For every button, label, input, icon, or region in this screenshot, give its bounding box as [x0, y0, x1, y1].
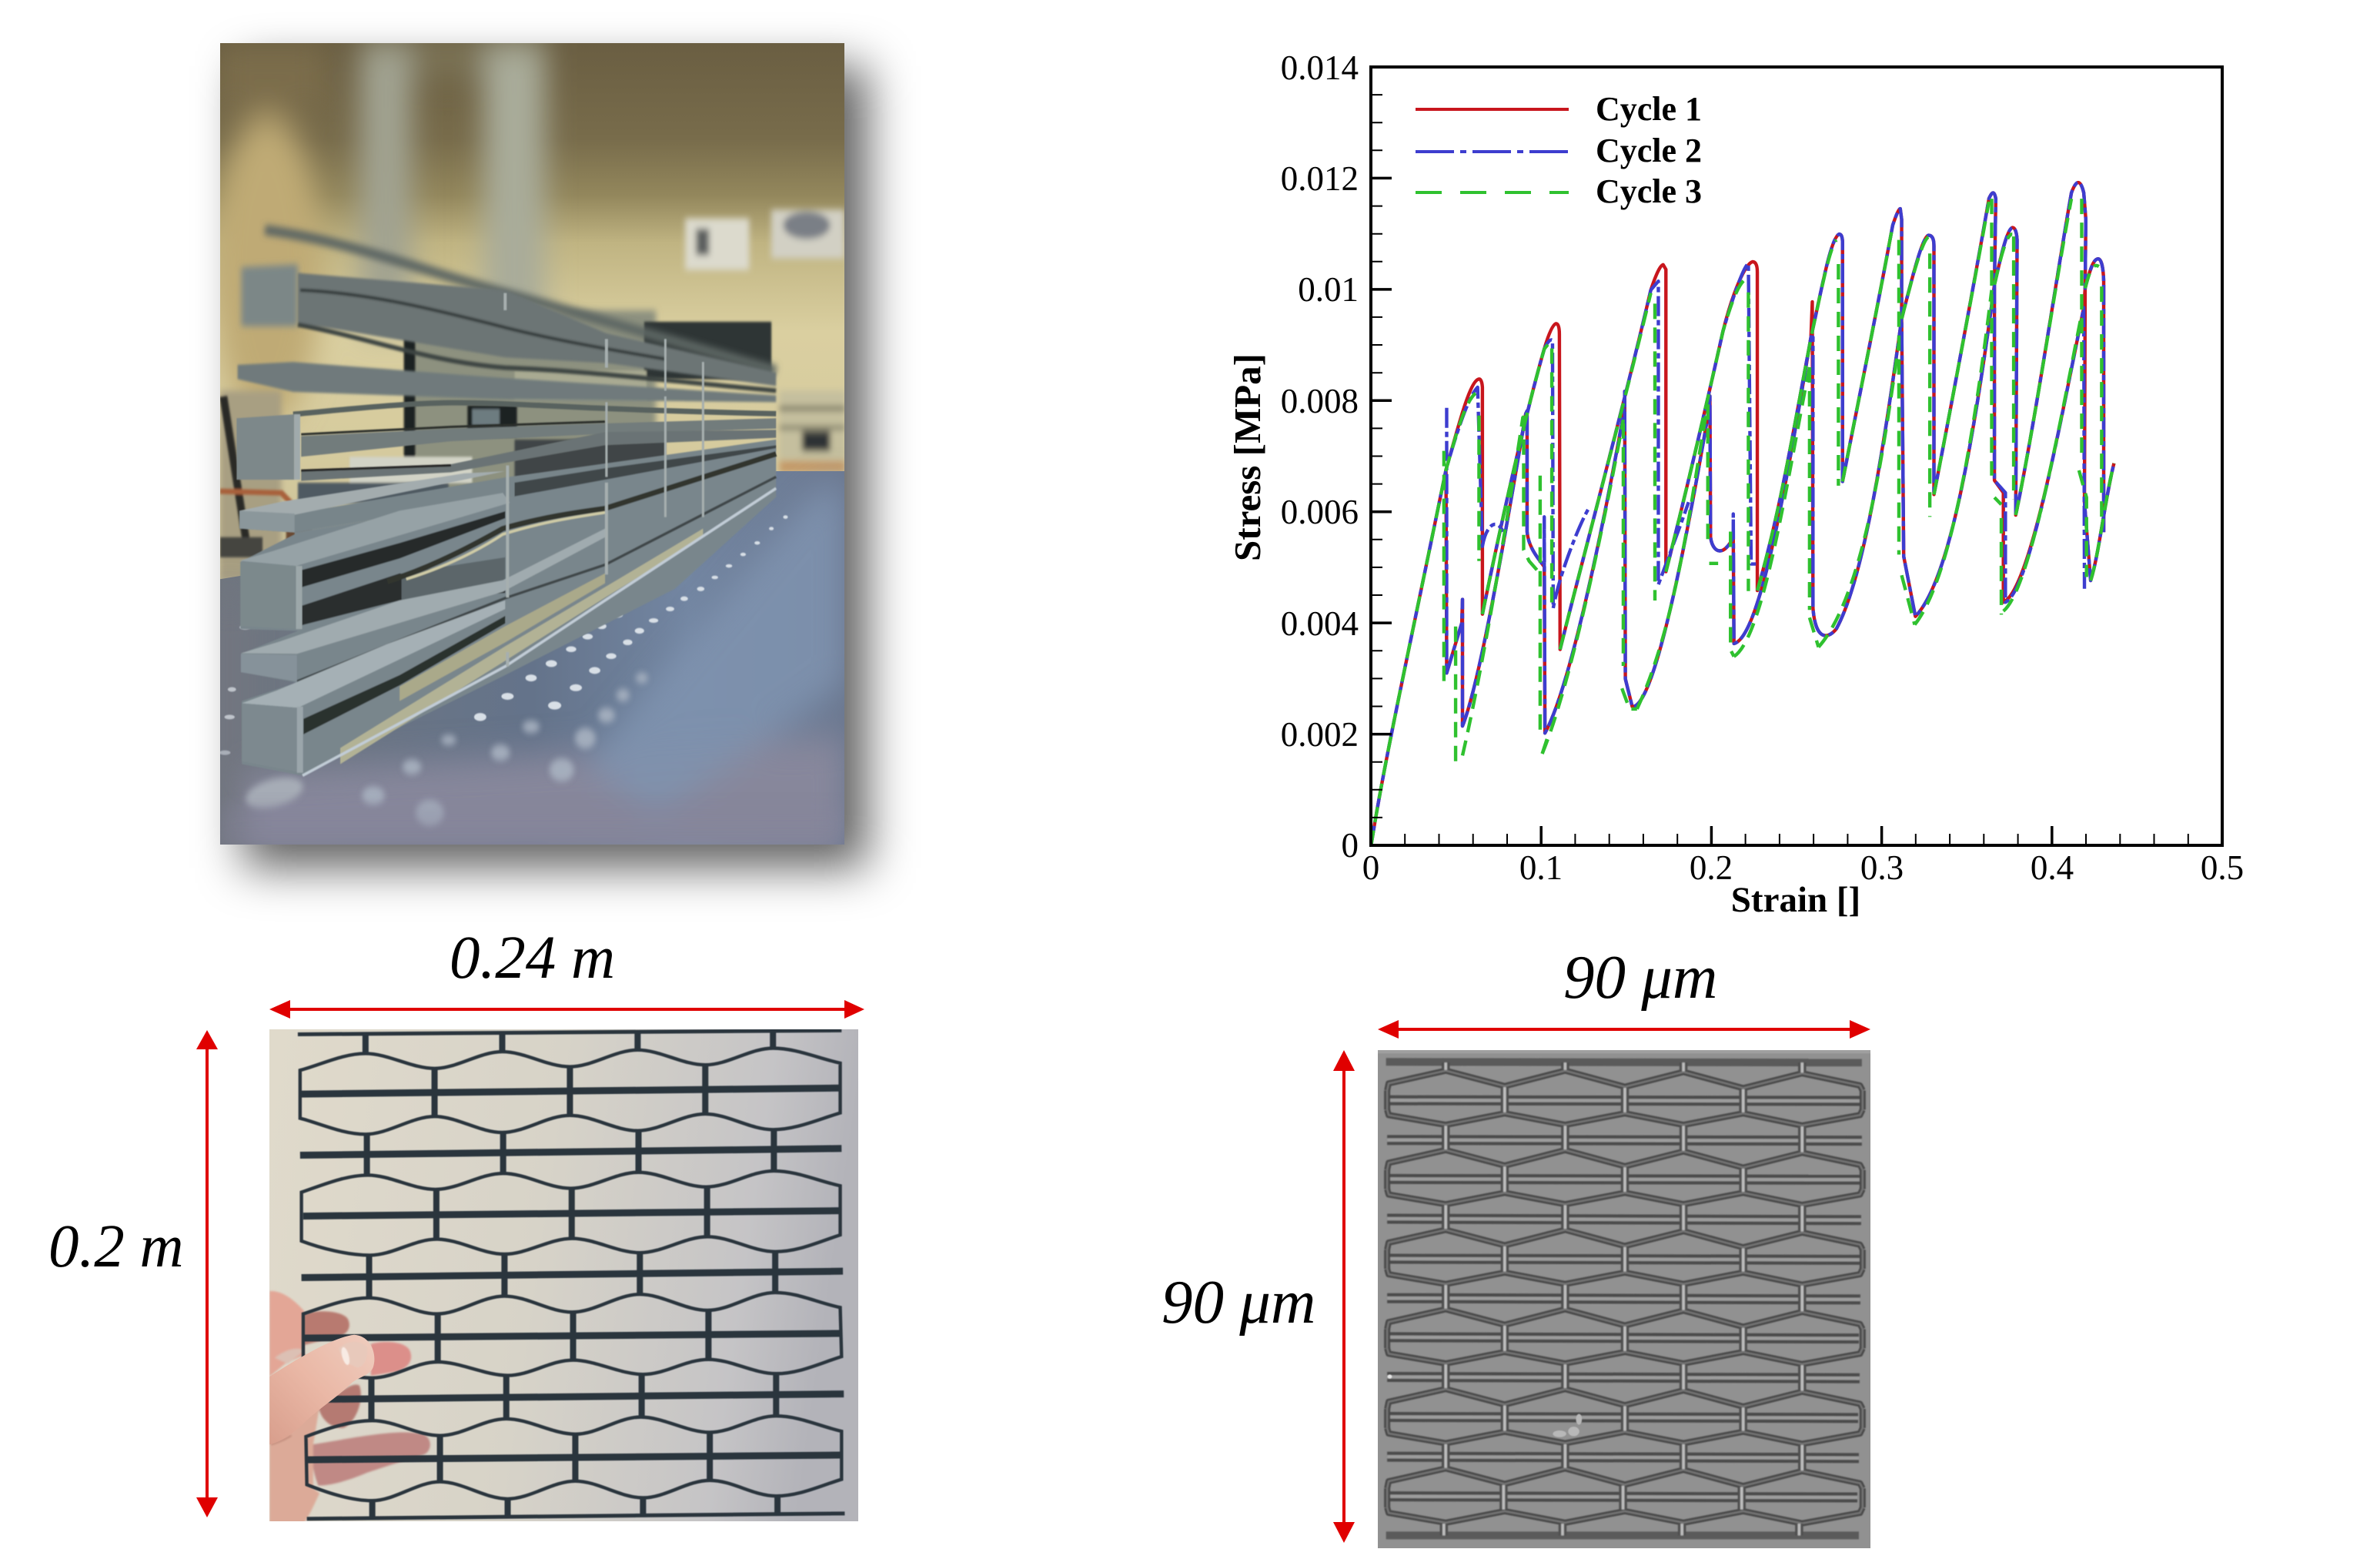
Cycle 3 curve (green dashed) [1371, 199, 2114, 845]
y-axis tick labels: 0.004 [1281, 604, 1359, 643]
lower beam block [240, 448, 776, 775]
lattice horizontal bars [298, 1030, 844, 1519]
arrow: horizontal 90 μm span [1378, 1020, 1870, 1039]
arrow: vertical 90 μm span [1333, 1050, 1355, 1543]
y-axis title: Stress [MPa] [1226, 353, 1269, 561]
legend: Cycle 1 [1596, 90, 1702, 128]
y-axis tick labels [1281, 49, 1359, 865]
dimension label: 90 μm horizontal: 90 μm [1563, 942, 1717, 1012]
Cycle 1 curve (red solid) [1371, 182, 2114, 845]
y-axis tick labels: 0.006 [1281, 493, 1359, 531]
dimension label: 0.24 m: 0.24 m [450, 925, 615, 992]
x-axis title: Strain [] [1731, 880, 1860, 920]
arrow: horizontal 0.24 m span [269, 1000, 864, 1019]
dimension label: 0.2 m: 0.2 m [48, 1213, 184, 1280]
panel: photo of the metre-scale aluminium structure [213, 40, 867, 868]
dimension label: 90 μm vertical: 90 μm [1162, 1267, 1315, 1337]
x-axis tick labels: 0.5 [2201, 848, 2244, 887]
panel: micrograph of micro-scale lattice [1378, 1050, 1870, 1548]
chart: stress vs strain for three cycles [1226, 49, 2244, 920]
photo drop shadow [243, 66, 867, 868]
y-axis tick labels: 0.014 [1281, 49, 1359, 87]
x-axis tick labels: 0.1 [1519, 848, 1563, 887]
photograph of beams on optical table [220, 43, 844, 845]
y-axis tick labels: 0 [1341, 826, 1359, 865]
table surface with mounting holes [213, 471, 844, 856]
lattice hexagon wave lines [300, 1048, 841, 1500]
legend [1416, 90, 1702, 210]
hand in front of lattice: thumb [269, 1335, 374, 1444]
Cycle 2 curve (blue dash-dot) [1371, 182, 2114, 845]
lattice vertical struts [366, 1031, 777, 1517]
y-axis tick labels: 0.002 [1281, 715, 1359, 754]
y-axis tick labels: 0.012 [1281, 159, 1359, 198]
legend: Cycle 2 [1596, 132, 1702, 169]
x-axis tick labels [1362, 848, 2244, 887]
debris speck on micrograph [1388, 1374, 1582, 1437]
arrow: vertical 0.2 m span [196, 1030, 218, 1517]
hand behind lattice: palm and fingers [269, 1291, 430, 1524]
legend: Cycle 3 [1596, 172, 1702, 210]
x-axis tick labels: 0 [1362, 848, 1379, 887]
aluminium beams in perspective [236, 230, 776, 775]
curves: Cycle 1, 2, 3 [1372, 180, 2116, 844]
x-axis tick labels: 0.2 [1690, 848, 1733, 887]
micrograph lattice lines [1386, 1062, 1863, 1535]
y-axis tick labels: 0.01 [1298, 270, 1359, 309]
axes frame and tick marks [1371, 67, 2222, 845]
x-axis tick labels: 0.4 [2031, 848, 2074, 887]
wall items and lab background [220, 209, 845, 580]
panel: photo of macro-scale lattice held by hand [269, 1029, 858, 1521]
x-axis tick labels: 0.3 [1860, 848, 1904, 887]
y-axis tick labels: 0.008 [1281, 382, 1359, 420]
